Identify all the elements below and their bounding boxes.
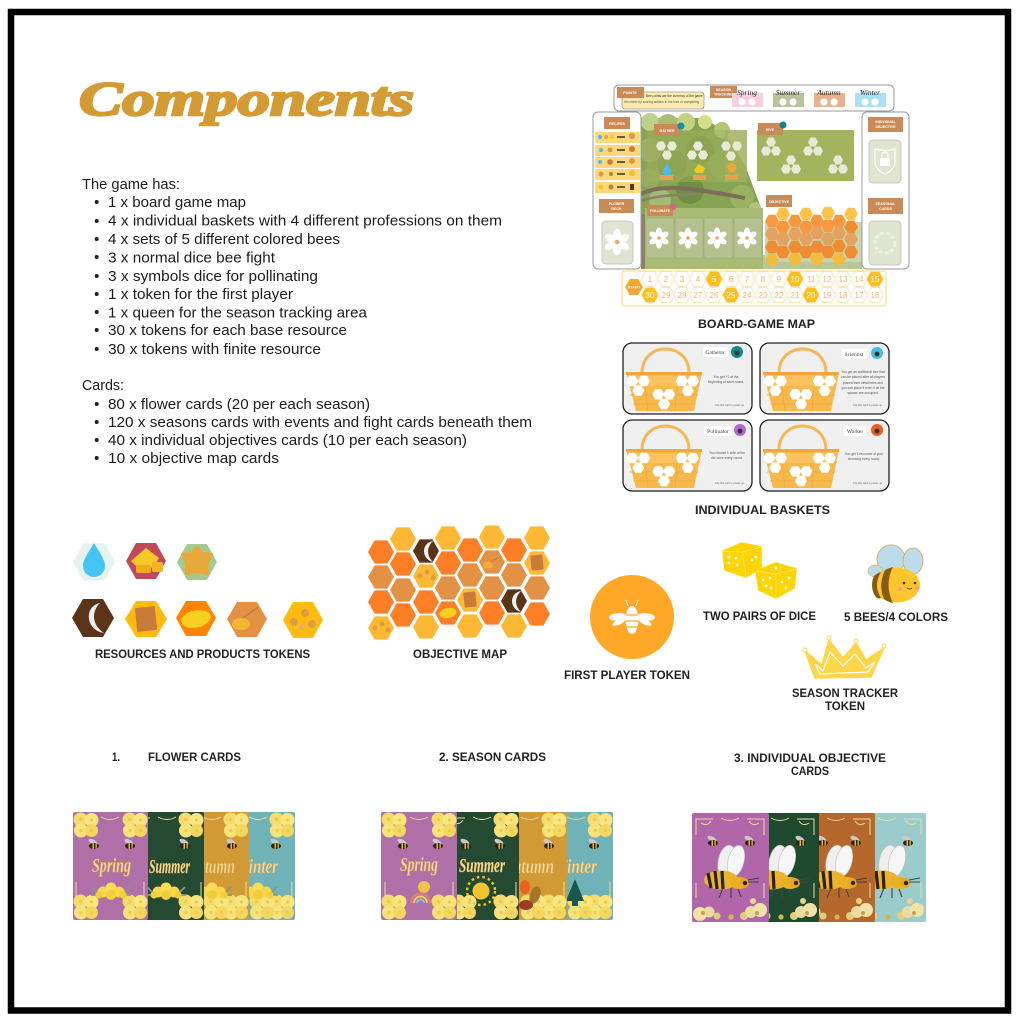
panel: individual objective and seasonal cards: INDIVIDUAL xyxy=(875,120,897,124)
panel: season tracking bar: Winter xyxy=(860,88,880,97)
heading: 5 bees / 4 colors: 5 BEES/4 COLORS xyxy=(844,612,948,624)
heading: season tracker token: TOKEN xyxy=(825,701,865,713)
text block: game contents list: 1 x queen for the season tracking area xyxy=(108,304,368,321)
score track: 9 xyxy=(777,275,782,284)
flower cards fan xyxy=(73,812,295,920)
panel: season tracking bar: Spring xyxy=(737,88,757,97)
panel: individual objective and seasonal cards: CARDS xyxy=(879,207,892,211)
score track: 12 xyxy=(823,275,832,284)
text block: game contents list: 30 x tokens for each base resource xyxy=(108,322,347,339)
heading: season tracker token xyxy=(792,688,899,713)
score track: START xyxy=(627,284,641,290)
token: gold xyxy=(126,543,166,579)
heading: individual objective cards xyxy=(734,753,886,778)
card: summer: Summer xyxy=(149,856,190,878)
score track: 5 xyxy=(712,275,717,284)
score track: 22 xyxy=(775,291,784,300)
card: summer: Summer xyxy=(459,855,505,877)
panel: individual objective and seasonal cards: SEASONAL xyxy=(876,202,896,206)
score track: 15 xyxy=(871,275,880,284)
panel: season tracking bar: Autumn xyxy=(816,88,841,97)
card: autumn xyxy=(491,812,567,920)
score track: 19 xyxy=(823,291,832,300)
text block: cards list xyxy=(82,377,532,467)
title: Components xyxy=(79,73,414,126)
icon: bee xyxy=(868,545,923,603)
text block: game contents list xyxy=(82,176,502,358)
panel: season tracking bar: Summer xyxy=(776,88,800,97)
card: purple xyxy=(692,813,769,922)
icon: sun xyxy=(467,877,495,905)
panel: gather xyxy=(647,122,747,182)
text block: cards list: 10 x objective map cards xyxy=(108,450,279,467)
card: autumn: Autumn xyxy=(187,856,235,878)
panel: season tracking bar: Bee points are the currency of the game xyxy=(646,94,703,98)
icon: crown xyxy=(803,636,886,678)
individual baskets xyxy=(623,343,889,491)
text block: game contents list: The game has: xyxy=(82,176,180,193)
basket: scientist: placed their initial bees and xyxy=(843,381,883,385)
token: dipper xyxy=(227,602,267,637)
panel: gather: GATHER xyxy=(660,129,675,133)
text block: cards list: 120 x seasons cards with events and fight cards beneath them xyxy=(108,414,532,431)
basket: worker: Worker xyxy=(847,429,863,435)
text block: cards list: 80 x flower cards (20 per each season) xyxy=(108,396,370,413)
basket: pollinator: die once every round. xyxy=(711,456,743,460)
text block: game contents list: 4 x sets of 5 different colored bees xyxy=(108,231,340,248)
heading: individual objective cards: CARDS xyxy=(791,766,829,778)
basket: worker: choosing every round. xyxy=(848,457,880,461)
panel: recipes and flower deck xyxy=(593,112,641,269)
card: winter xyxy=(537,812,613,920)
card: summer xyxy=(443,812,519,920)
basket: pollinator: Flip this card to power up. xyxy=(715,481,745,485)
score track: 11 xyxy=(807,275,816,284)
panel: hive xyxy=(757,122,854,181)
basket: gatherer: Flip this card to power up. xyxy=(715,403,745,407)
panel: season tracking bar: POINTS xyxy=(623,91,637,95)
icon: dice xyxy=(723,543,796,598)
icon: rainbow xyxy=(411,881,430,903)
score track: 16 xyxy=(871,291,880,300)
score track: 27 xyxy=(694,291,703,300)
score track: 25 xyxy=(727,291,736,300)
score track: 6 xyxy=(729,275,734,284)
text block: game contents list: 3 x symbols dice for pollinating xyxy=(108,268,318,285)
heading: board-game map: BOARD-GAME MAP xyxy=(698,319,815,331)
heading: season cards: 2. SEASON CARDS xyxy=(439,752,546,764)
icon: pine tree xyxy=(566,879,584,906)
card: blue xyxy=(848,813,926,922)
resource and product tokens xyxy=(72,543,323,638)
panel: recipes and flower deck: FLOWER xyxy=(609,202,625,206)
basket: scientist: Flip this card to power up. xyxy=(853,403,883,407)
heading: flower cards: FLOWER CARDS xyxy=(148,752,241,764)
card: brown xyxy=(797,813,875,922)
text block: game contents list: 1 x token for the first player xyxy=(108,286,293,303)
score track: 30 xyxy=(646,291,655,300)
token: wax xyxy=(72,599,114,637)
text block: cards list: 40 x individual objectives cards (10 per each season) xyxy=(108,432,467,449)
panel: objective hex map on board xyxy=(765,195,858,266)
season cards fan xyxy=(381,812,613,920)
score track: 21 xyxy=(791,291,800,300)
panel: individual objective and seasonal cards xyxy=(862,112,909,269)
first player token xyxy=(590,575,674,659)
illustration: tree xyxy=(638,113,862,269)
heading: individual objective cards: 3. INDIVIDUAL OBJECTIVE xyxy=(734,753,886,765)
card: spring: Spring xyxy=(400,854,438,876)
card: winter: Winter xyxy=(236,856,278,878)
basket: scientist: you can place it even if all the xyxy=(841,386,885,390)
panel: pollinate: POLLINATE xyxy=(650,209,671,213)
heading: first player token: FIRST PLAYER TOKEN xyxy=(564,670,690,682)
card: green xyxy=(741,813,819,922)
basket: scientist: You get an additional bee that xyxy=(841,370,885,374)
heading: individual baskets: INDIVIDUAL BASKETS xyxy=(695,505,830,517)
card: winter xyxy=(219,812,295,920)
card: autumn xyxy=(173,812,249,920)
panel: hive: HIVE xyxy=(766,128,775,132)
score track: 29 xyxy=(662,291,671,300)
text block: game contents list: 1 x board game map xyxy=(108,194,246,211)
basket: pollinator xyxy=(623,420,752,491)
basket: scientist: Scientist xyxy=(845,352,864,358)
panel: season tracking bar: SEASON xyxy=(716,88,731,92)
card: spring xyxy=(73,812,148,920)
basket: scientist: spaces are occupied. xyxy=(847,391,879,395)
panel: recipes and flower deck: RECIPES xyxy=(609,122,625,126)
card: spring xyxy=(381,812,457,920)
heading: season tracker token: SEASON TRACKER xyxy=(792,688,899,700)
token: water xyxy=(73,543,115,580)
score track: 14 xyxy=(855,275,864,284)
panel: season tracking bar: TRACKING xyxy=(714,92,733,96)
score track: 20 xyxy=(807,291,816,300)
score track xyxy=(622,271,886,306)
basket: worker: You get 1 resource of your xyxy=(845,452,884,456)
board game map xyxy=(593,85,909,306)
score track: 1 xyxy=(648,275,653,284)
score track: 23 xyxy=(759,291,768,300)
panel: pollinate xyxy=(645,204,763,269)
basket: gatherer xyxy=(623,343,752,414)
score track: 17 xyxy=(855,291,864,300)
token: honeycomb xyxy=(283,602,323,638)
token: honey xyxy=(176,601,216,636)
card: spring: Spring xyxy=(92,855,131,877)
heading: flower cards: 1. xyxy=(112,752,120,764)
text block: game contents list: 4 x individual baskets with 4 different professions on them xyxy=(108,213,502,230)
score track: 7 xyxy=(745,275,750,284)
score track: 8 xyxy=(761,275,766,284)
panel: season tracking bar: Win them by scoring actions in the hive or completing xyxy=(624,100,700,104)
score track: 4 xyxy=(696,275,701,284)
score track: 18 xyxy=(839,291,848,300)
panel: objective hex map on board: OBJECTIVE xyxy=(769,200,790,204)
basket: worker: Flip this card to power up. xyxy=(853,481,883,485)
panel: recipes and flower deck: DECK xyxy=(611,207,622,211)
card: summer xyxy=(128,812,204,920)
token: book xyxy=(125,601,167,637)
heading: two pairs of dice: TWO PAIRS OF DICE xyxy=(703,611,816,623)
icon: autumn leaves xyxy=(519,880,543,910)
card: autumn: Autumn xyxy=(501,856,554,878)
score track: 28 xyxy=(678,291,687,300)
basket: gatherer: Gatherer xyxy=(705,350,725,356)
basket: scientist xyxy=(760,343,889,414)
score track: 13 xyxy=(839,275,848,284)
score track: 10 xyxy=(791,275,800,284)
basket: pollinator: You choose 1 side of the xyxy=(709,451,745,455)
text block: cards list: Cards: xyxy=(82,377,124,394)
text block: game contents list: 3 x normal dice bee fight xyxy=(108,249,276,266)
score track: 26 xyxy=(710,291,719,300)
score track: 24 xyxy=(743,291,752,300)
heading: objective map: OBJECTIVE MAP xyxy=(413,649,507,661)
basket: scientist: can be placed after all players xyxy=(841,375,885,379)
heading: resources and products tokens: RESOURCES AND PRODUCTS TOKENS xyxy=(95,649,310,661)
basket: worker xyxy=(760,420,889,491)
basket: gatherer: beginning of each round. xyxy=(708,380,744,384)
individual objective cards fan xyxy=(692,813,926,922)
panel: individual objective and seasonal cards: OBJECTIVE xyxy=(875,125,896,129)
panel: season tracking bar xyxy=(614,85,894,111)
score track: 3 xyxy=(680,275,685,284)
text block: game contents list: 30 x tokens with finite resource xyxy=(108,341,321,358)
objective map xyxy=(368,525,550,640)
card: winter: Winter xyxy=(554,856,597,878)
token: star xyxy=(177,544,217,580)
score track: 2 xyxy=(664,275,669,284)
basket: gatherer: You get +1 at the xyxy=(714,375,739,379)
basket: pollinator: Pollinator xyxy=(707,429,729,435)
